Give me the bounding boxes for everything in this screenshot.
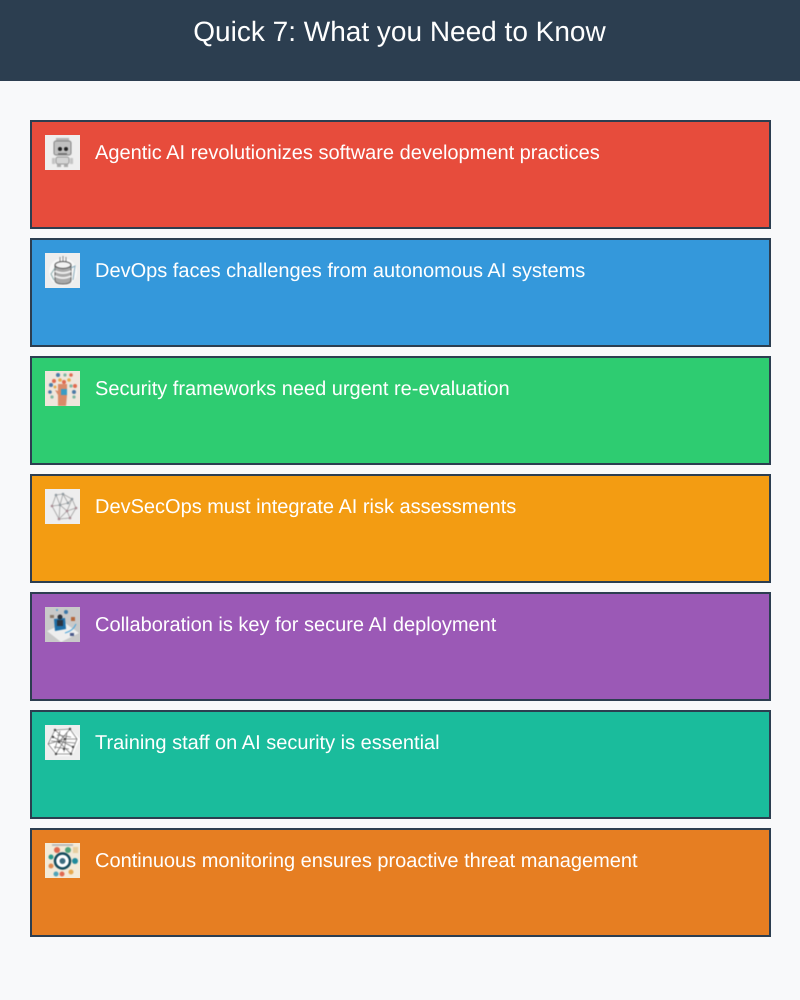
header band <box>0 0 800 81</box>
icon: server barrel <box>45 253 80 288</box>
icon: dense network <box>45 725 80 760</box>
text: DevSecOps must integrate AI risk assessments <box>95 496 516 518</box>
icon: monitoring hub <box>45 843 80 878</box>
icon: robot <box>45 135 80 170</box>
text: Security frameworks need urgent re-evaluation <box>95 378 510 400</box>
panel: point 7 <box>30 828 771 937</box>
panel: point 2 <box>30 238 771 347</box>
panel: point 3 <box>30 356 771 465</box>
text: Agentic AI revolutionizes software development practices <box>95 142 600 164</box>
panel: point 4 <box>30 474 771 583</box>
text: Continuous monitoring ensures proactive threat management <box>95 850 638 872</box>
panel: point 5 <box>30 592 771 701</box>
icon: laptop collaboration <box>45 607 80 642</box>
panel: point 1 <box>30 120 771 229</box>
title: Quick 7: What you Need to Know <box>193 16 606 47</box>
text: Training staff on AI security is essential <box>95 732 440 754</box>
text: DevOps faces challenges from autonomous AI systems <box>95 260 585 282</box>
text: Collaboration is key for secure AI deployment <box>95 614 496 636</box>
icon: network sphere <box>45 489 80 524</box>
icon: hand with tech icons <box>45 371 80 406</box>
panel: point 6 <box>30 710 771 819</box>
